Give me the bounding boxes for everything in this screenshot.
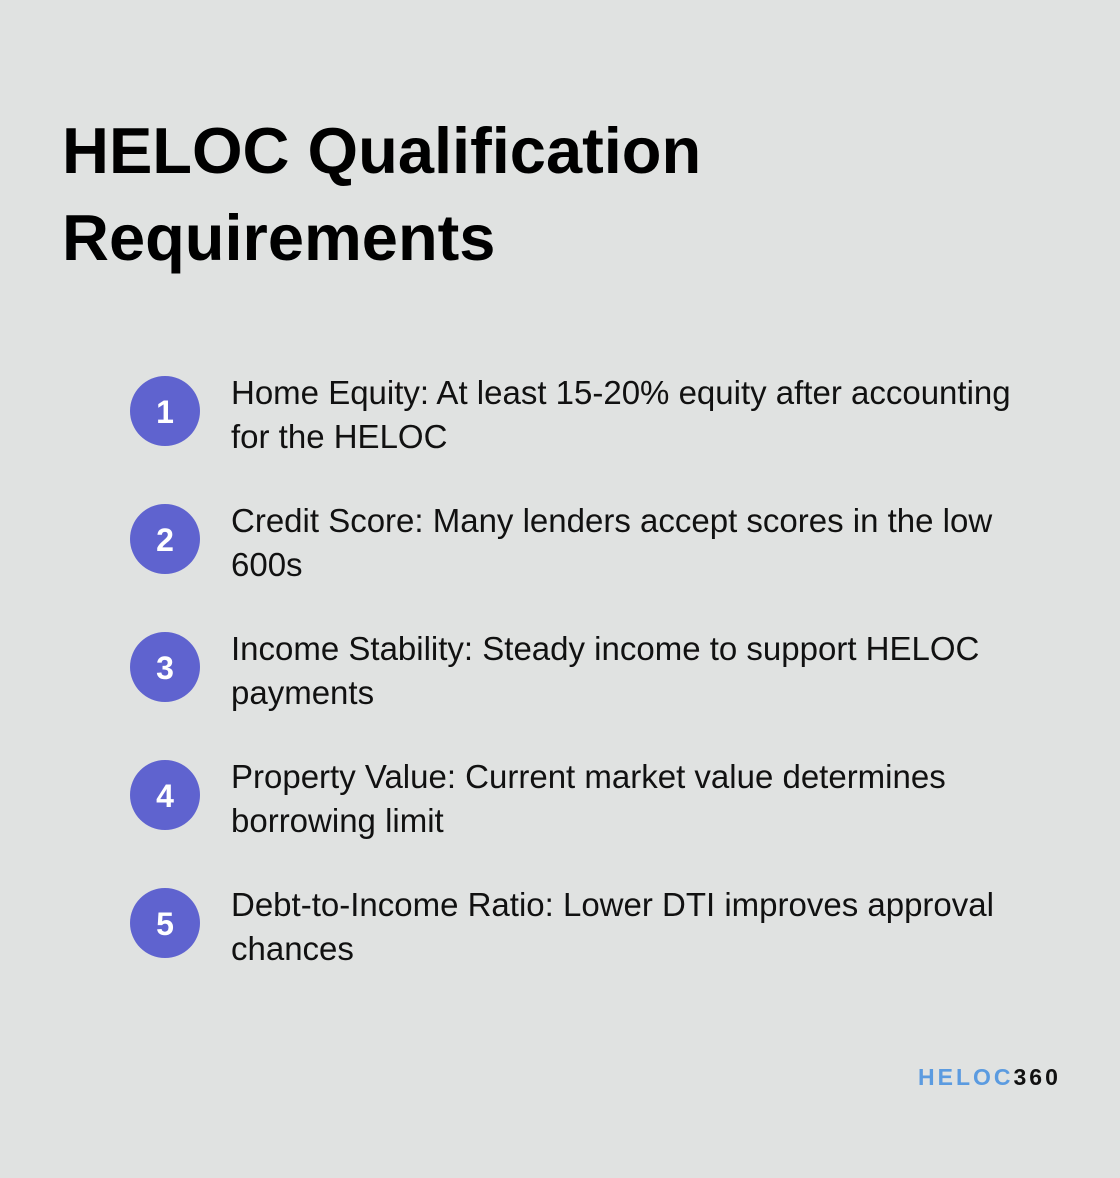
text 2: 600s — [231, 546, 303, 583]
title — [62, 114, 701, 274]
text 5: Debt-to-Income Ratio: Lower DTI improves approval — [231, 886, 994, 923]
icon: number 1 — [130, 376, 200, 446]
text 4: Property Value: Current market value determines — [231, 758, 946, 795]
icon: number 2 — [130, 504, 200, 574]
text 1: for the HELOC — [231, 418, 447, 455]
text 3 — [231, 630, 979, 711]
text 5 — [231, 886, 994, 967]
text 5: chances — [231, 930, 354, 967]
title: HELOC Qualification — [62, 114, 701, 187]
text 4: borrowing limit — [231, 802, 444, 839]
item 2 — [130, 502, 992, 583]
item 3 — [130, 630, 979, 711]
icon: number 3 — [130, 632, 200, 702]
text 4 — [231, 758, 946, 839]
icon: number 5: 5 — [156, 906, 174, 942]
logo: HELOC360 — [918, 1064, 1061, 1090]
item 5 — [130, 886, 994, 967]
icon: number 2: 2 — [156, 522, 174, 558]
icon: number 3: 3 — [156, 650, 174, 686]
text 2 — [231, 502, 992, 583]
text 2: Credit Score: Many lenders accept scores in the low — [231, 502, 992, 539]
text 3: Income Stability: Steady income to support HELOC — [231, 630, 979, 667]
icon: number 1: 1 — [156, 394, 174, 430]
title: Requirements — [62, 201, 495, 274]
text 1 — [231, 374, 1011, 455]
text 1: Home Equity: At least 15-20% equity after accounting — [231, 374, 1011, 411]
icon: number 5 — [130, 888, 200, 958]
item 4 — [130, 758, 946, 839]
icon: number 4: 4 — [156, 778, 174, 814]
text 3: payments — [231, 674, 374, 711]
item 1 — [130, 374, 1011, 455]
icon: number 4 — [130, 760, 200, 830]
